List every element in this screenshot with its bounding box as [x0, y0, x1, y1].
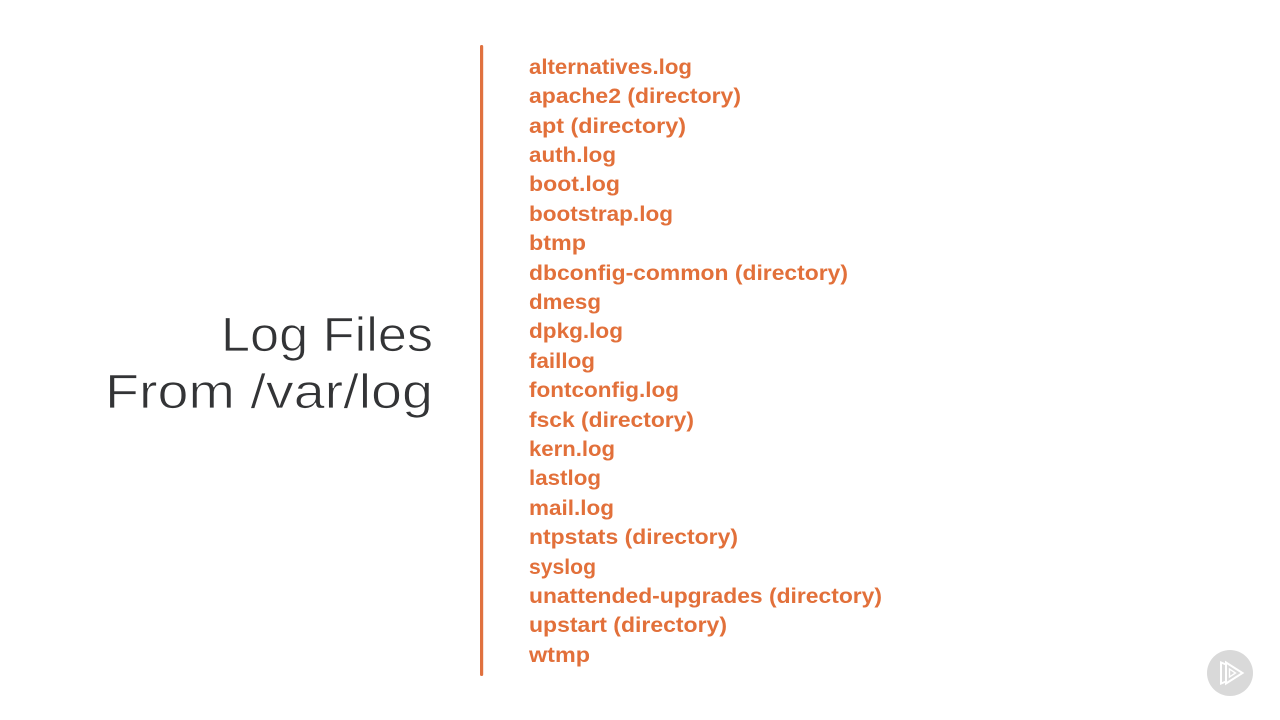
icon: play logo badge: [1207, 650, 1253, 696]
vertical divider bar: [480, 45, 483, 676]
list item: mail.log: mail.log: [529, 496, 614, 520]
list item: lastlog: lastlog: [529, 466, 601, 490]
log file list: [528, 55, 882, 667]
list item: dmesg: dmesg: [529, 290, 601, 314]
list item: unattended-upgrades: unattended-upgrades (directory): [529, 584, 882, 608]
list item: wtmp: wtmp: [528, 643, 590, 667]
list item: apt: apt (directory): [529, 114, 686, 138]
list item: ntpstats: ntpstats (directory): [529, 525, 738, 549]
list item: dpkg.log: dpkg.log: [529, 319, 623, 343]
list item: apache2: apache2 (directory): [529, 84, 741, 108]
list item: boot.log: boot.log: [529, 172, 620, 196]
list item: auth.log: auth.log: [529, 143, 616, 167]
list item: dbconfig-common: dbconfig-common (directory): [529, 261, 848, 285]
list item: syslog: syslog: [529, 555, 596, 579]
list item: upstart: upstart (directory): [529, 613, 727, 637]
list item: alternatives.log: alternatives.log: [529, 55, 692, 79]
list item: fontconfig.log: fontconfig.log: [529, 378, 679, 402]
list item: fsck: fsck (directory): [529, 408, 694, 432]
title: Log Files: [221, 308, 433, 362]
list item: faillog: faillog: [529, 349, 595, 373]
title: From /var/log: [105, 365, 433, 419]
list item: bootstrap.log: bootstrap.log: [529, 202, 673, 226]
list item: kern.log: kern.log: [529, 437, 615, 461]
list item: btmp: btmp: [529, 231, 586, 255]
title: [105, 308, 433, 419]
